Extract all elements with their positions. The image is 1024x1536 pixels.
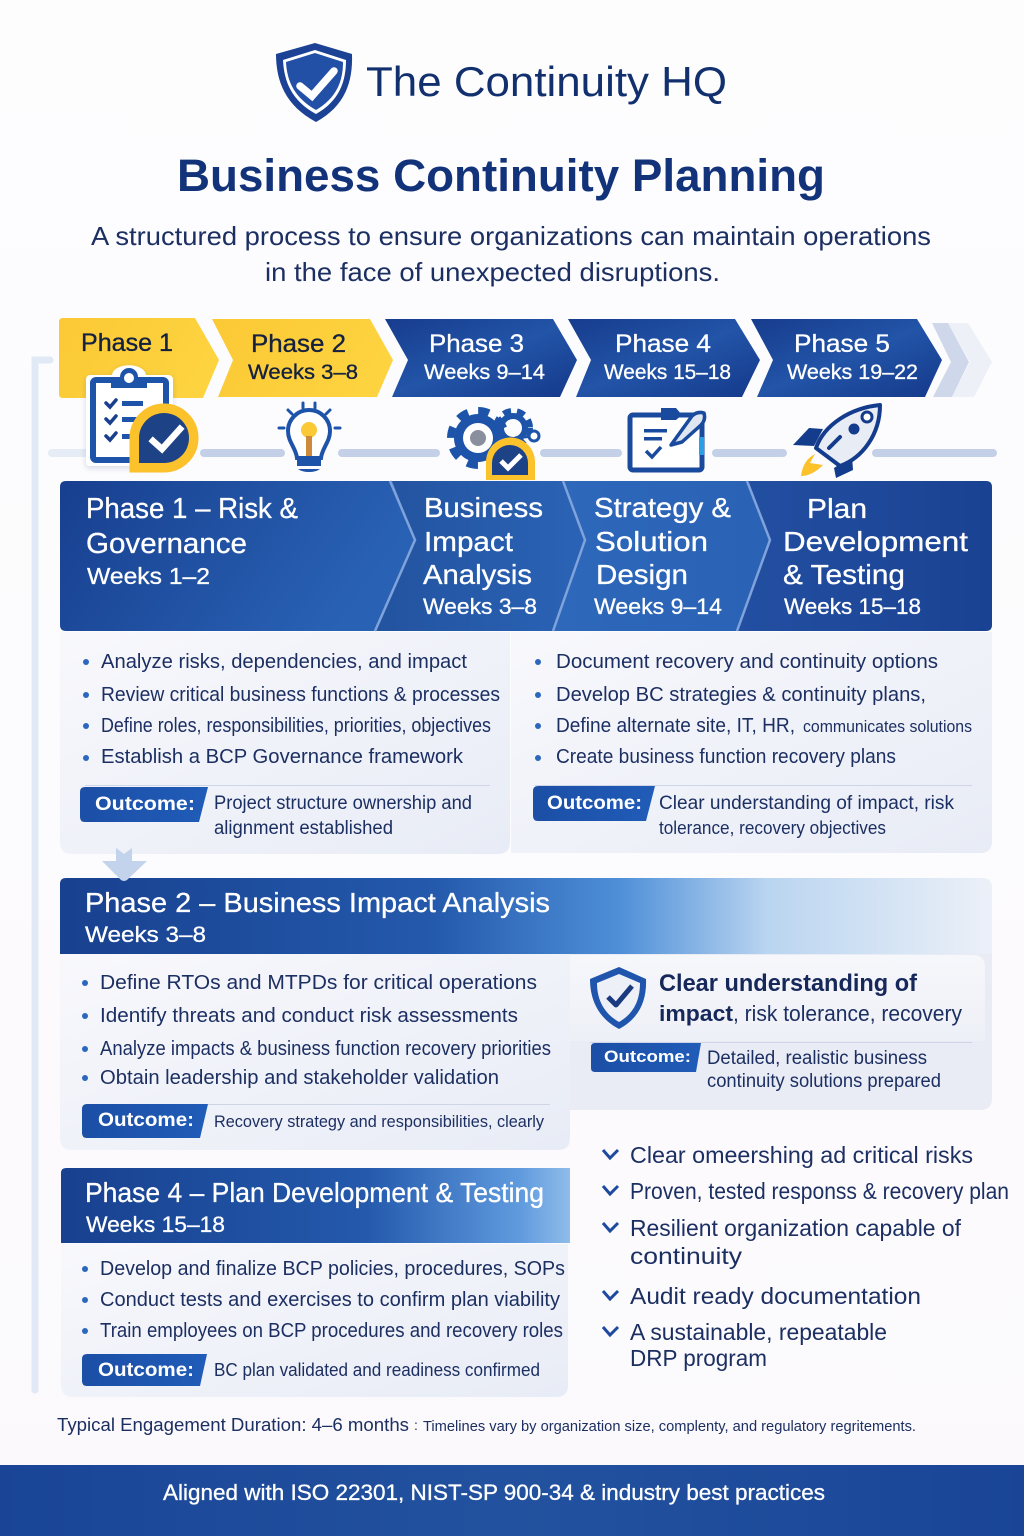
bullet list: Define roles, responsibilities, priorities, objectives <box>101 715 491 737</box>
panel: phase 2 details <box>60 954 570 1150</box>
bullet list: Create business function recovery plans <box>556 746 896 768</box>
band segment: plan development and testing: Development <box>783 526 968 557</box>
outcome badge <box>80 787 208 822</box>
timeline connector <box>48 449 997 457</box>
outcome badge <box>82 1104 208 1138</box>
engagement duration note: Timelines vary by organization size, complenty, and regulatory regritements. <box>423 1418 916 1435</box>
engagement duration note: : <box>414 1417 418 1433</box>
chevron: phase 5: Weeks 19–22 <box>787 361 918 384</box>
outcome text: BC plan validated and readiness confirmed <box>214 1360 540 1380</box>
band segment: risk and governance: Phase 1 – Risk & <box>86 493 298 525</box>
outcome text: tolerance, recovery objectives <box>659 818 886 838</box>
engagement duration note <box>57 1415 916 1435</box>
band segment: business impact analysis: Weeks 3–8 <box>423 594 537 619</box>
outcome text: continuity solutions prepared <box>707 1071 941 1092</box>
callout text: , risk tolerance, recovery <box>733 1001 962 1026</box>
band segment: plan development and testing <box>737 481 992 631</box>
panel: phase 4 details <box>61 1244 568 1397</box>
logo: shield and wordmark <box>276 43 727 122</box>
subtitle: in the face of unexpected disruptions. <box>265 257 720 287</box>
callout text <box>659 970 962 1026</box>
bullet list: Document recovery and continuity options <box>556 651 938 673</box>
bullet list: Establish a BCP Governance framework <box>101 746 464 768</box>
bullet list <box>83 651 500 768</box>
band segment: business impact analysis <box>375 481 585 631</box>
bullet list: Define RTOs and MTPDs for critical operations <box>100 972 537 994</box>
subtitle <box>91 221 931 287</box>
outcome text: Clear understanding of impact, risk <box>659 793 954 814</box>
chevron: phase 1 <box>59 318 219 398</box>
icon: logo shield <box>276 43 352 122</box>
band segment: plan development and testing: Weeks 15–18 <box>784 594 921 619</box>
icon: shield check <box>590 967 646 1029</box>
benefits checklist: Clear omeershing ad critical risks <box>630 1142 973 1168</box>
bullet list: Analyze risks, dependencies, and impact <box>101 651 467 673</box>
bullet list: Conduct tests and exercises to confirm plan viability <box>100 1289 560 1311</box>
benefits checklist <box>603 1142 1009 1371</box>
engagement duration note: Typical Engagement Duration: 4–6 months <box>57 1415 409 1435</box>
chevron: phase 5: Phase 5 <box>794 330 890 358</box>
band segment: risk and governance: Weeks 1–2 <box>87 563 210 589</box>
outcome text: Recovery strategy and responsibilities, clearly <box>214 1112 544 1131</box>
panel: phase 2 band: Weeks 3–8 <box>85 922 206 947</box>
chevron: phase 2 <box>212 319 393 397</box>
bullet list: Analyze impacts & business function recovery priorities <box>100 1038 551 1060</box>
panel: clear understanding callout <box>570 954 992 1110</box>
band segment: strategy and solution design: Design <box>596 559 688 590</box>
phase header band <box>60 481 992 631</box>
panel: phase 2 band: Phase 2 – Business Impact Analysis <box>85 887 550 918</box>
outcome badge <box>591 1043 701 1072</box>
panel: phase 1 details <box>60 632 510 854</box>
chevron: phase 2: Weeks 3–8 <box>248 361 358 384</box>
outcome badge: Outcome: <box>98 1360 194 1381</box>
icon: clipboard with check badge <box>86 365 198 472</box>
outcome text: Detailed, realistic business <box>707 1048 927 1069</box>
icon: rocket <box>793 405 880 478</box>
bullet list: communicates solutions <box>803 717 972 736</box>
bullet list <box>82 1258 565 1342</box>
band segment: strategy and solution design: Strategy & <box>594 492 731 523</box>
panel: phase 2 band <box>60 878 992 954</box>
outcome badge: Outcome: <box>604 1047 691 1066</box>
chevron: phase 4 <box>568 319 760 397</box>
logo wordmark: The Continuity HQ <box>366 58 727 105</box>
chevron: phase 4: Weeks 15–18 <box>604 361 731 384</box>
icon: gears with check badge <box>451 411 539 480</box>
bullet list <box>82 972 551 1089</box>
chevron: phase 3 <box>385 319 577 397</box>
left timeline rail <box>35 360 50 1390</box>
outcome text <box>659 793 954 838</box>
benefits checklist: A sustainable, repeatable <box>630 1319 887 1345</box>
bullet list <box>535 651 972 768</box>
phase chevrons <box>59 318 992 398</box>
bullet list: Identify threats and conduct risk assessments <box>100 1005 518 1027</box>
footer band: Aligned with ISO 22301, NIST-SP 900-34 & industry best practices <box>163 1480 825 1505</box>
outcome text <box>707 1048 941 1092</box>
title: Business Continuity Planning <box>177 150 825 201</box>
panel: phase 4 band: Phase 4 – Plan Development & Testing <box>85 1177 544 1208</box>
outcome badge: Outcome: <box>95 794 195 815</box>
band segment: business impact analysis: Impact <box>424 526 513 557</box>
benefits checklist: DRP program <box>630 1345 767 1371</box>
panel: phase 4 band <box>61 1168 570 1243</box>
bullet list: Review critical business functions & processes <box>101 684 500 706</box>
bullet list: Develop and finalize BCP policies, procedures, SOPs <box>100 1258 565 1280</box>
outcome text: alignment established <box>214 818 393 839</box>
band segment: plan development and testing: & Testing <box>783 559 905 590</box>
outcome badge: Outcome: <box>98 1110 194 1131</box>
callout text: impact <box>659 1001 734 1026</box>
ghost chevrons <box>932 323 992 397</box>
chevron: phase 3: Weeks 9–14 <box>424 361 545 384</box>
band segment: risk and governance <box>60 481 415 631</box>
icon: light bulb <box>279 403 340 472</box>
benefits checklist: continuity <box>630 1243 743 1269</box>
chevron: phase 1: Phase 1 <box>81 329 173 357</box>
callout text: Clear understanding of <box>659 970 918 997</box>
chevron: phase 2: Phase 2 <box>251 330 346 358</box>
band segment: risk and governance: Governance <box>86 528 247 560</box>
footer band <box>0 1465 1024 1536</box>
band segment: strategy and solution design: Solution <box>595 526 708 557</box>
outcome badge <box>533 786 655 821</box>
bullet list: Define alternate site, IT, HR, <box>556 715 795 737</box>
outcome badge: Outcome: <box>547 793 642 814</box>
chevron: phase 5 <box>751 319 942 397</box>
outcome badge <box>82 1354 207 1386</box>
outcome text <box>214 793 472 839</box>
arrow: down to phase 2 <box>102 848 147 881</box>
band segment: plan development and testing: Plan <box>807 493 867 524</box>
band segment: strategy and solution design: Weeks 9–14 <box>594 594 722 619</box>
subtitle: A structured process to ensure organizations can maintain operations <box>91 221 931 251</box>
band segment: strategy and solution design <box>553 481 770 631</box>
benefits checklist: Resilient organization capable of <box>630 1215 962 1241</box>
bullet list: Obtain leadership and stakeholder validation <box>100 1067 499 1089</box>
bullet list: Train employees on BCP procedures and recovery roles <box>100 1320 563 1342</box>
benefits checklist: Audit ready documentation <box>630 1283 921 1309</box>
band segment: business impact analysis: Business <box>424 492 543 523</box>
icon: document with pen <box>630 408 705 470</box>
bullet list: Develop BC strategies & continuity plans, <box>556 684 926 706</box>
panel: strategy details <box>511 632 992 853</box>
band segment: business impact analysis: Analysis <box>423 559 532 590</box>
chevron: phase 3: Phase 3 <box>429 330 524 358</box>
chevron: phase 4: Phase 4 <box>615 330 711 358</box>
panel: phase 4 band: Weeks 15–18 <box>86 1212 225 1237</box>
outcome text: Project structure ownership and <box>214 793 472 814</box>
